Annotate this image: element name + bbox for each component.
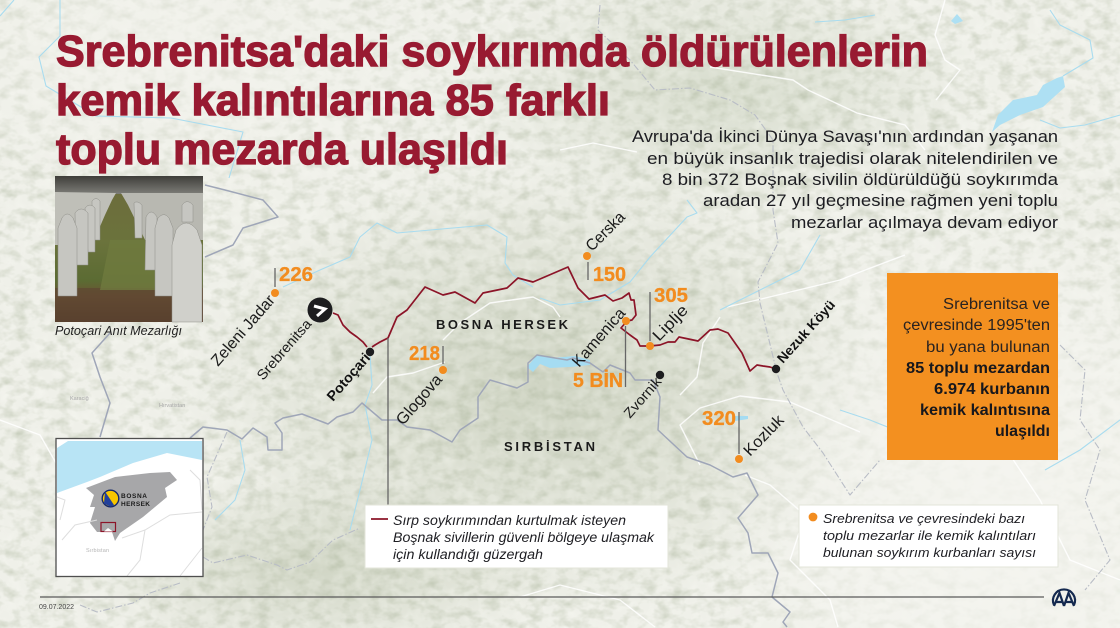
site: Kamenica: Kamenica	[569, 305, 629, 371]
site: Glogova: Glogova	[393, 371, 446, 429]
inset locator map: BOSNA	[121, 493, 147, 500]
legend: route: Sırp soykırımından kurtulmak isteyen	[393, 513, 626, 528]
photo caption: Potoçari Anıt Mezarlığı	[55, 324, 182, 338]
site: Zeleni Jadar: 226	[279, 264, 313, 286]
site: Liplje: 305	[654, 285, 688, 307]
marker: Nezuk Köyü: Nezuk Köyü	[774, 297, 838, 366]
faint map place labels: Karaciğ	[70, 396, 89, 402]
orange info box: kemik kalıntısına	[920, 402, 1050, 419]
intro paragraph: en büyük insanlık trajedisi olarak nitelendirilen ve	[647, 150, 1058, 168]
marker: Srebrenitsa	[253, 298, 332, 383]
faint map place labels	[70, 396, 185, 409]
inset locator map: Sırbistan	[86, 548, 109, 554]
site: Cerska	[583, 209, 629, 286]
marker: Potoçari: Potoçari	[323, 350, 373, 404]
legend: route: Boşnak sivillerin güvenli bölgeye ulaşmak	[393, 530, 655, 545]
orange info box: 85 toplu mezardan	[906, 360, 1050, 377]
site: Cerska: 150	[593, 264, 626, 286]
site: Zeleni Jadar	[208, 264, 313, 370]
orange info box: Srebrenitsa ve	[943, 296, 1050, 313]
reservoir	[527, 355, 590, 372]
small reservoir east	[735, 416, 748, 421]
orange info box: çevresinde 1995'ten	[903, 317, 1050, 334]
orange info box: bu yana bulunan	[926, 339, 1050, 356]
country border river	[92, 185, 790, 627]
legend: mass graves: toplu mezarlar ile kemik kalıntıları	[823, 528, 1036, 543]
legend: route	[365, 505, 668, 568]
country label: Bosnia: BOSNA HERSEK	[436, 317, 569, 332]
title: Srebrenitsa'daki soykırımda öldürülenlerin	[56, 27, 928, 76]
site: Liplje	[646, 285, 692, 350]
site: Zeleni Jadar: Zeleni Jadar	[208, 292, 279, 370]
AA logo	[1053, 589, 1075, 606]
flag	[102, 490, 119, 507]
legend: mass graves: bulunan soykırım kurbanları sayısı	[823, 545, 1036, 560]
inset locator map	[56, 438, 203, 576]
intro paragraph: aradan 27 yıl geçmesine rağmen yeni toplu	[703, 192, 1058, 210]
lake	[992, 76, 1065, 132]
marker: Zvornik: Zvornik	[620, 373, 665, 421]
footer rule	[40, 596, 1044, 598]
orange info box: ulaşıldı	[995, 423, 1050, 440]
escape route	[333, 267, 776, 371]
legend: route: için kullandığı güzergah	[393, 547, 543, 562]
site: Kozluk: Kozluk	[741, 411, 788, 460]
photo: Potoçari memorial	[55, 176, 203, 322]
intro paragraph: mezarlar açılmaya devam ediyor	[791, 214, 1059, 232]
site: Cerska: Cerska	[583, 209, 629, 255]
inset locator map: HERSEK	[121, 501, 150, 508]
gravestones	[58, 198, 202, 322]
site: Glogova	[393, 343, 447, 429]
country label: Serbia: SIRBİSTAN	[504, 439, 595, 454]
title	[56, 27, 928, 174]
site: Liplje: Liplje	[650, 302, 692, 345]
site: Kamenica: 5 BİN	[573, 369, 623, 392]
site: Kozluk	[702, 408, 788, 463]
legend: mass graves	[799, 505, 1058, 567]
legend leader line	[387, 338, 389, 505]
intro paragraph: Avrupa'da İkinci Dünya Savaşı'nın ardından yaşanan	[632, 127, 1058, 146]
intro paragraph	[632, 127, 1059, 232]
site: Kozluk: 320	[702, 408, 736, 430]
title: kemik kalıntılarına 85 farklı	[56, 76, 610, 125]
legend: mass graves: Srebrenitsa ve çevresindeki bazı	[823, 511, 1025, 526]
marker: Srebrenitsa: Srebrenitsa	[253, 316, 315, 383]
intro paragraph: 8 bin 372 Boşnak sivilin öldürüldüğü soykırımda	[662, 171, 1059, 189]
title: toplu mezarda ulaşıldı	[56, 125, 508, 174]
faint map place labels: Hırvatistan	[159, 403, 185, 409]
date: 09.07.2022	[39, 604, 74, 611]
site: Glogova: 218	[409, 343, 440, 365]
orange info box	[887, 273, 1058, 460]
leader lines	[275, 262, 739, 454]
orange info box: 6.974 kurbanın	[934, 381, 1050, 398]
small lake	[951, 14, 963, 24]
